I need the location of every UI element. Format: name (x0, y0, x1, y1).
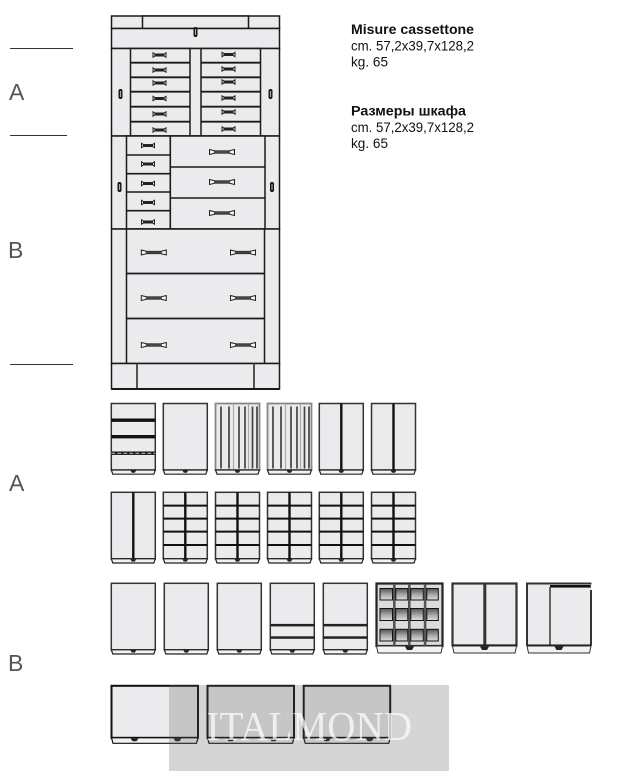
Russian dimensions: kg. 65 (351, 136, 388, 151)
banded module 1 (270, 583, 314, 654)
label: B upper: B (8, 237, 23, 263)
row A2: drawer options (111, 492, 416, 563)
Russian dimensions (351, 104, 474, 151)
watermark (169, 685, 449, 771)
cabinet base with feet (112, 364, 280, 389)
two-door module 1 (319, 404, 363, 474)
drawer grid module 2 (216, 492, 260, 563)
banded module 2 (323, 583, 367, 654)
row B2: wide drawer modules (112, 686, 390, 743)
Italian dimensions (351, 22, 475, 70)
Italian dimensions: kg. 65 (351, 54, 388, 70)
cabinet top (112, 16, 280, 48)
Italian dimensions: cm. 57,2x39,7x128,2 (351, 38, 474, 54)
Russian dimensions: cm. 57,2x39,7x128,2 (351, 120, 474, 135)
label: B lower: B (8, 650, 23, 676)
plain module 3 (217, 583, 261, 654)
module with shelves (111, 404, 155, 474)
plain module (163, 404, 207, 474)
plain module 1 (111, 583, 155, 654)
Russian dimensions: Размеры шкафа (351, 104, 467, 118)
compartment grid module (376, 584, 442, 653)
drawer grid module 3 (268, 492, 312, 563)
two-door module (111, 492, 155, 563)
wide drawer module 2 (208, 686, 294, 743)
label: A upper: A (9, 79, 25, 105)
striped module 2 (268, 404, 312, 474)
drawer grid module 1 (163, 492, 207, 563)
dimension lines and section labels (9, 48, 73, 364)
plain module 2 (164, 583, 208, 654)
dimensions text (351, 22, 475, 151)
section A: two drawer columns (112, 48, 280, 136)
wide drawer module 3 (304, 686, 390, 743)
wide two-door module (452, 584, 516, 653)
wide module with top drawer (527, 584, 592, 653)
cabinet front elevation (112, 16, 280, 389)
wide drawer module 1 (112, 686, 198, 743)
drawer grid module 4 (319, 492, 363, 563)
drawer grid module 5 (372, 492, 416, 563)
watermark: ITALMOND (206, 703, 412, 749)
two-door module 2 (372, 404, 416, 474)
row B1: lower module options (111, 583, 592, 654)
striped module 1 (216, 404, 260, 474)
section B lower: three wide drawers (112, 229, 280, 364)
label: A lower: A (9, 470, 25, 496)
row A1: interior options (111, 404, 416, 474)
Italian dimensions: Misure cassettone (351, 22, 475, 37)
section B upper: small and medium drawers (112, 136, 280, 229)
